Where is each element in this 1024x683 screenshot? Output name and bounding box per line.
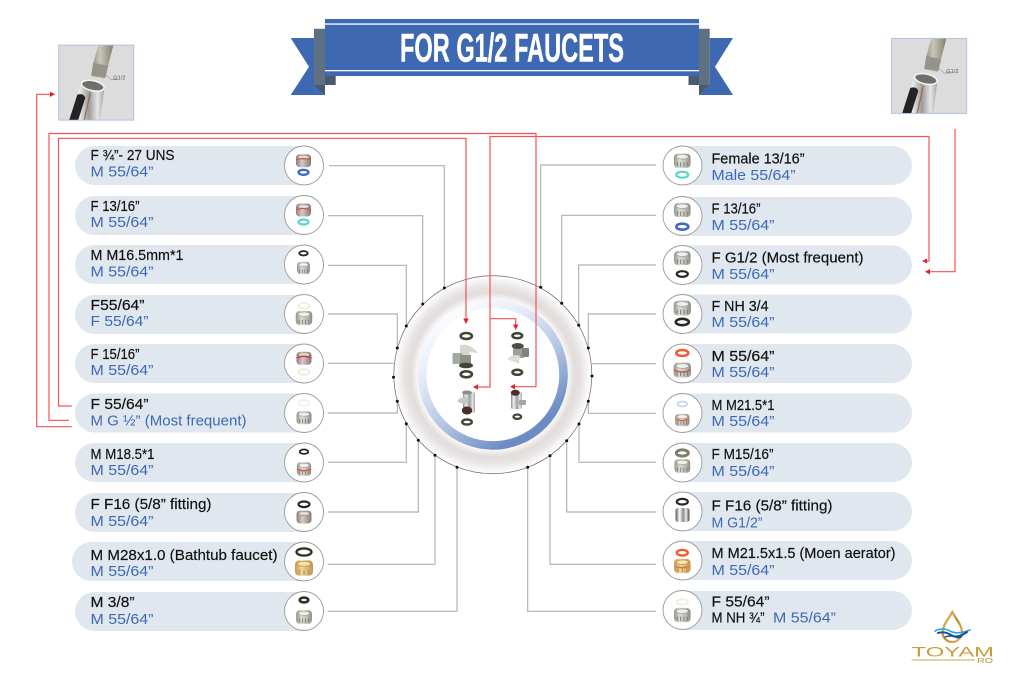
row right 10: M 55/64”: [773, 610, 836, 627]
thumbnail: [284, 146, 324, 185]
row right 5: M 55/64”: [712, 364, 774, 381]
thumbnail: [663, 344, 702, 383]
row left 4: [75, 294, 324, 334]
row right 1: Female 13/16”: [712, 151, 805, 167]
connector lines right: [528, 165, 656, 611]
row left 6: M G ½” (Most frequent): [90, 413, 247, 430]
row left 4: F 55/64”: [90, 313, 148, 330]
row left 9: M M28x1.0 (Bathtub faucet): [90, 548, 278, 564]
row left 5: F 15/16”: [90, 347, 140, 363]
row left 3: M M16.5mm*1: [90, 248, 184, 264]
red arrow: F 55/64 to hub top left: [58, 138, 469, 406]
left faucet photo: [59, 45, 134, 120]
thumbnail: [663, 394, 702, 432]
row left 1: M 55/64”: [90, 164, 154, 180]
thumbnail: [663, 146, 702, 185]
logo waves: [935, 629, 970, 638]
row left 6: [75, 394, 324, 432]
row left 6: F 55/64”: [90, 397, 149, 413]
row right 8: F F16 (5/8” fitting): [712, 499, 832, 515]
row right 1: Male 55/64”: [712, 167, 796, 184]
row right 8: M G1/2”: [712, 515, 762, 532]
logo suffix: RO: [977, 658, 994, 665]
row left 2: M 55/64”: [90, 214, 154, 231]
row right 2: M 55/64”: [712, 217, 774, 234]
hub anchor dots: [392, 286, 594, 469]
row right 6: M 55/64”: [712, 413, 774, 430]
hub adapter top left: [452, 333, 478, 377]
row right 8: [663, 492, 912, 532]
row right 10: M NH ¾”: [712, 611, 765, 627]
row left 5: M 55/64”: [90, 362, 154, 379]
row left 10: [75, 592, 324, 631]
row right 9: M 55/64”: [712, 562, 774, 579]
thumbnail: [663, 590, 702, 630]
row left 7: M M18.5*1: [90, 447, 154, 463]
row right 4: F NH 3/4: [712, 299, 768, 315]
hub adapter top right: [507, 333, 529, 375]
thumbnail: [663, 541, 702, 580]
logo drop: [942, 612, 962, 642]
banner right tail: [699, 38, 733, 95]
red arrow: F G1/2 to hub: [473, 136, 929, 390]
thumbnail: [284, 492, 324, 532]
logo underline: [912, 660, 975, 661]
thumbnail: [663, 492, 702, 531]
hub adapter bottom left: [457, 390, 475, 424]
row left 10: M 55/64”: [90, 611, 154, 628]
hub blue ring: [422, 304, 564, 445]
row left 7: M 55/64”: [90, 462, 154, 479]
row left 8: [75, 492, 324, 532]
row right 6: M M21.5*1: [712, 398, 774, 414]
row left 3: M 55/64”: [90, 264, 154, 281]
hub disc: [394, 276, 592, 474]
red arrow: M G 1/2 to hub bottom right: [49, 134, 536, 420]
row left 1: [75, 146, 324, 185]
banner body: [325, 19, 699, 76]
Toyam logo: [912, 612, 994, 665]
thumbnail: [284, 344, 324, 383]
connector lines left: [328, 166, 457, 611]
row right 9: [663, 541, 912, 580]
thumbnail: [284, 394, 324, 432]
row right 7: F M15/16”: [712, 447, 774, 463]
banner left fold: [314, 29, 336, 95]
row right 6: [663, 394, 912, 432]
thumbnail: [284, 443, 324, 482]
thumbnail: [284, 245, 324, 284]
row right 3: F G1/2 (Most frequent): [712, 251, 864, 267]
row right 10: F 55/64”: [712, 595, 770, 611]
banner left tail: [291, 38, 325, 95]
row left 3: [75, 245, 324, 284]
thumbnail: [284, 592, 324, 630]
row right 10: [663, 590, 912, 630]
left faucet photo: G1/2: [113, 76, 125, 82]
logo wordmark: TOYAM: [912, 644, 994, 660]
row left 8: F F16 (5/8” fitting): [90, 497, 212, 513]
row left 4: F55/64”: [90, 298, 145, 314]
title banner: [291, 19, 733, 95]
row left 7: [75, 443, 324, 482]
row left 5: [75, 344, 324, 383]
row right 2: F 13/16”: [712, 201, 761, 217]
thumbnail: [663, 443, 702, 482]
row left 10: M 3/8”: [90, 595, 135, 611]
row right 7: [663, 443, 912, 482]
row left 2: [75, 196, 324, 235]
thumbnail: [663, 196, 702, 236]
title text: FOR G1/2 FAUCETS: [400, 27, 624, 71]
row right 7: M 55/64”: [712, 463, 774, 480]
row left 9: [72, 542, 324, 581]
red arrow: left photo to M G 1/2: [37, 92, 72, 427]
thumbnail: [284, 542, 324, 581]
thumbnail: [284, 196, 324, 234]
row right 2: [663, 196, 912, 236]
right faucet photo: G1/2: [946, 69, 958, 75]
thumbnail: [663, 246, 702, 284]
hub adapter bottom right: [511, 390, 526, 419]
central hub: [392, 276, 594, 474]
row right 4: [663, 294, 912, 334]
row left 2: F 13/16”: [90, 199, 140, 215]
thumbnail: [284, 294, 324, 334]
banner right fold: [688, 29, 710, 95]
right faucet photo: [892, 38, 967, 113]
red arrow: right photo to F G1/2: [925, 129, 955, 274]
thumbnail: [663, 294, 702, 334]
row left 9: M 55/64”: [90, 563, 154, 580]
row left 8: M 55/64”: [90, 513, 154, 530]
row right 3: M 55/64”: [712, 266, 774, 283]
row right 4: M 55/64”: [712, 314, 774, 331]
row right 9: M M21.5x1.5 (Moen aerator): [712, 546, 896, 562]
row left 1: F ¾”- 27 UNS: [90, 148, 174, 164]
row right 5: [663, 344, 912, 383]
row right 3: [663, 246, 912, 284]
row right 5: M 55/64”: [712, 349, 775, 365]
row right 1: [663, 146, 912, 185]
